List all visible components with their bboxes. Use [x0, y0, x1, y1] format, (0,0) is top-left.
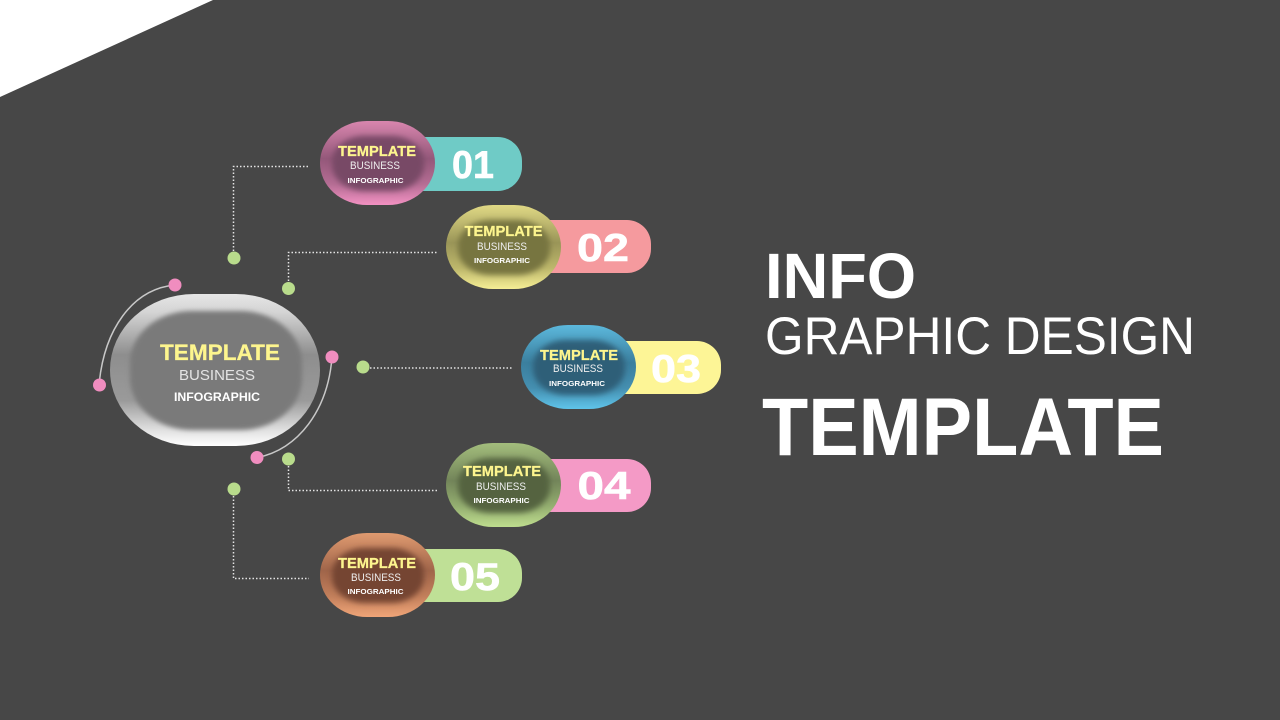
title: INFO: INFO	[765, 240, 916, 312]
glossy pod 03	[521, 325, 636, 409]
number tab 04	[526, 459, 651, 512]
title: GRAPHIC DESIGN: GRAPHIC DESIGN	[765, 307, 1195, 366]
connector: dotted line to item 05	[234, 489, 309, 578]
central pod text: BUSINESS	[179, 368, 255, 384]
title: TEMPLATE: TEMPLATE	[762, 382, 1164, 473]
glossy pod 04: TEMPLATE	[463, 464, 541, 480]
number tab 02	[526, 220, 651, 273]
glossy pod 03: BUSINESS	[553, 363, 603, 375]
central pod text	[160, 340, 280, 404]
number tab 01: 01	[452, 144, 494, 187]
glossy pod 01	[320, 121, 435, 205]
glossy pod 02: BUSINESS	[477, 241, 527, 253]
number tab 02: 02	[577, 227, 629, 270]
glossy pod 05: TEMPLATE	[338, 556, 416, 572]
number tab 05	[400, 549, 522, 602]
number tab 01	[400, 137, 522, 191]
glossy pod 05: BUSINESS	[351, 572, 401, 584]
orbit arc: upper left	[93, 278, 182, 392]
item 05	[320, 533, 522, 617]
number tab 03	[600, 341, 721, 394]
orbit arc: lower right	[250, 350, 338, 464]
connector: dotted line to item 01	[234, 166, 309, 258]
white corner shape	[0, 0, 213, 97]
item 04	[446, 443, 651, 527]
number tab 04: 04	[578, 465, 631, 508]
item 02	[446, 205, 651, 289]
item 03	[521, 325, 721, 409]
title block	[762, 240, 1195, 473]
central pod text: INFOGRAPHIC	[174, 390, 260, 404]
number tab 05: 05	[450, 556, 500, 599]
glossy pod 03: TEMPLATE	[540, 348, 618, 364]
glossy pod 01: INFOGRAPHIC	[348, 176, 404, 185]
connector: dotted line to item 04	[288, 459, 438, 490]
central pod text: TEMPLATE	[160, 340, 280, 365]
item 01	[320, 121, 522, 205]
green connector dots	[228, 252, 370, 496]
glossy pod 04: INFOGRAPHIC	[474, 496, 530, 505]
central glossy pod	[110, 294, 320, 446]
glossy pod 01: BUSINESS	[350, 160, 400, 172]
glossy pod 05: INFOGRAPHIC	[348, 587, 404, 596]
connector: dotted line to item 02	[288, 252, 438, 288]
glossy pod 04: BUSINESS	[476, 481, 526, 493]
glossy pod 01: TEMPLATE	[338, 144, 416, 160]
glossy pod 02	[446, 205, 561, 289]
glossy pod 05	[320, 533, 435, 617]
number tab 03: 03	[651, 348, 701, 391]
glossy pod 03: INFOGRAPHIC	[549, 379, 606, 388]
glossy pod 02: TEMPLATE	[464, 224, 543, 240]
glossy pod 02: INFOGRAPHIC	[474, 256, 531, 265]
connector: dotted line to item 03	[363, 367, 512, 369]
glossy pod 04	[446, 443, 561, 527]
